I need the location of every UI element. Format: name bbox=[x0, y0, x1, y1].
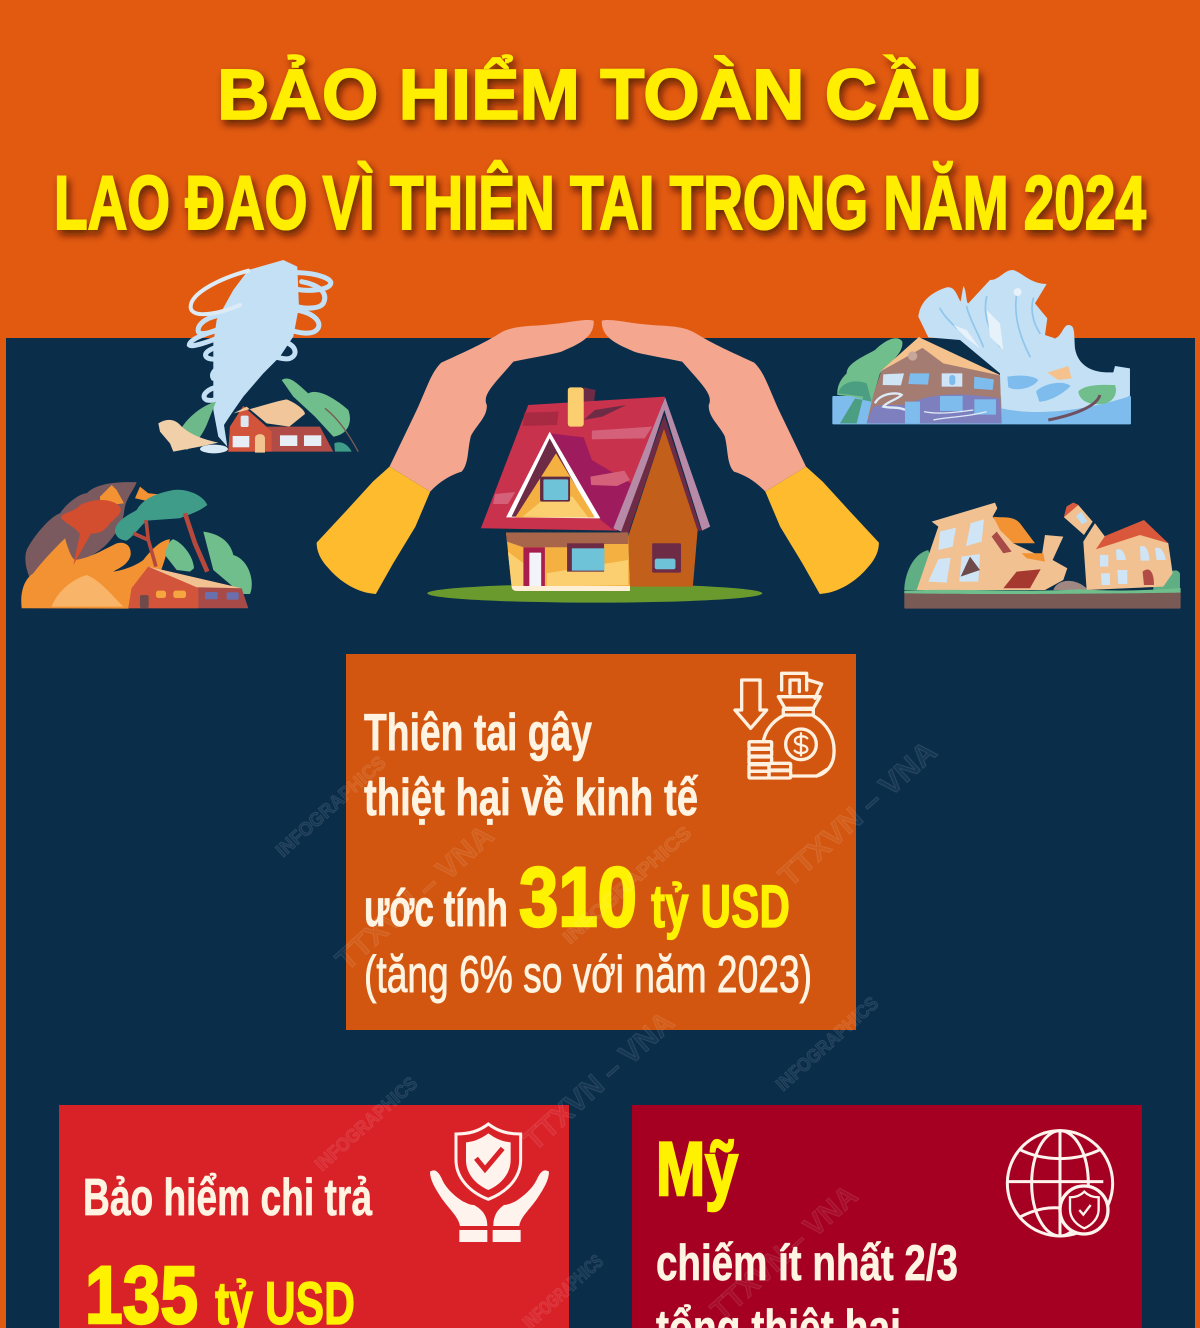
watermarks: TTXVN – VNA bbox=[705, 1179, 864, 1327]
watermarks: TTXVN – VNA bbox=[773, 735, 943, 893]
right hand bbox=[602, 320, 879, 594]
watermarks bbox=[272, 735, 943, 1328]
icon: shield in two hands bbox=[430, 1124, 549, 1242]
panel: economic damage bbox=[346, 654, 856, 1030]
text: insurance pays: Bảo hiểm chi trả bbox=[83, 1169, 373, 1227]
figure: 310 billion USD: 310 bbox=[519, 850, 637, 944]
watermarks: INFOGRAPHICS bbox=[772, 993, 883, 1096]
icon: hands protecting a house bbox=[317, 320, 879, 603]
left hand bbox=[317, 320, 594, 594]
text: United States: Mỹ bbox=[656, 1127, 738, 1212]
panel: navy body bbox=[6, 338, 1195, 1328]
icon: flood wave over a house bbox=[832, 270, 1131, 424]
panel: United States share bbox=[632, 1105, 1142, 1328]
figure: 310 billion USD bbox=[519, 850, 790, 944]
figure: 135 billion USD bbox=[85, 1250, 355, 1328]
text: estimated: ước tính bbox=[364, 880, 508, 938]
icon: tornado hitting a house bbox=[158, 260, 358, 453]
text: economic damage line 2: thiệt hại về kinh tế bbox=[364, 769, 698, 827]
watermarks: INFOGRAPHICS bbox=[311, 1073, 422, 1176]
icon: earthquake collapsed buildings bbox=[904, 503, 1181, 609]
house bbox=[427, 387, 762, 603]
text: up 6 percent vs 2023: (tăng 6% so với năm 2023) bbox=[364, 946, 812, 1004]
title: BẢO HIỂM TOÀN CẦU bbox=[217, 55, 982, 135]
panel: insurance payout bbox=[59, 1105, 569, 1328]
figure: 310 billion USD: tỷ USD bbox=[651, 873, 790, 940]
title bbox=[54, 55, 1146, 246]
icon: money bag with down arrow bbox=[735, 673, 834, 778]
icon: globe with shield bbox=[1007, 1131, 1113, 1236]
icon: wildfire bbox=[21, 482, 252, 609]
text: at least two thirds: chiếm ít nhất 2/3 bbox=[656, 1235, 958, 1291]
text: economic damage line 1: Thiên tai gây bbox=[364, 704, 592, 762]
watermarks: TTXVN – VNA bbox=[518, 1006, 681, 1157]
watermarks: INFOGRAPHICS bbox=[559, 823, 696, 949]
watermarks: INFOGRAPHICS bbox=[272, 752, 390, 862]
watermarks: TTXVN – VNA bbox=[330, 819, 500, 977]
